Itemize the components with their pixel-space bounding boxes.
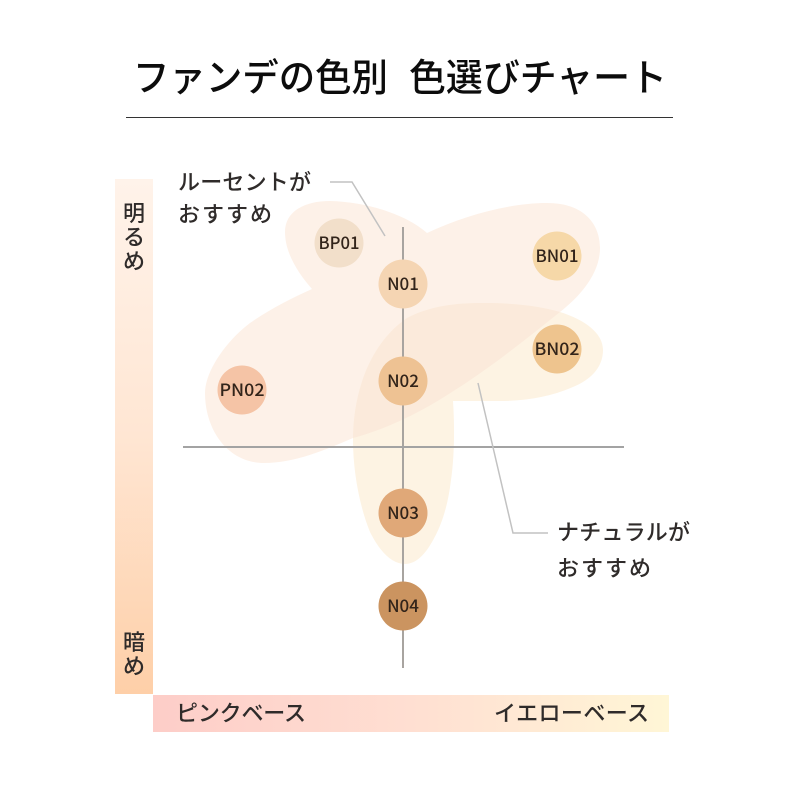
- callout: lucent: ルーセントが: [178, 165, 311, 197]
- brightness axis bar: [115, 179, 153, 694]
- base axis bar: [153, 695, 669, 732]
- label: brighter: る: [123, 220, 145, 252]
- callout: natural: [557, 515, 690, 583]
- swatch: N03: [378, 488, 428, 538]
- swatch: N04: [378, 582, 428, 630]
- title: ファンデの色別: [133, 47, 388, 102]
- label: brighter: 明: [123, 196, 145, 228]
- swatch: N04: N04: [387, 592, 419, 617]
- title: 色選びチャート: [409, 47, 667, 102]
- label: pink base: ピンクベース: [176, 696, 306, 728]
- callout: lucent: おすすめ: [178, 197, 272, 229]
- swatch: N01: N01: [387, 270, 419, 295]
- leader line: natural: [478, 383, 548, 533]
- swatch: N02: [378, 356, 428, 406]
- swatch: BP01: BP01: [318, 229, 360, 254]
- swatch: PN02: [218, 366, 266, 414]
- label: brighter: [123, 196, 145, 276]
- title rule: [126, 116, 673, 118]
- axis lines: [183, 227, 624, 668]
- label: yellow base: イエローベース: [494, 696, 649, 728]
- swatch: N02: N02: [387, 367, 419, 392]
- swatch: BN02: [532, 324, 582, 374]
- swatch: N01: [378, 260, 428, 308]
- swatch: BN01: [532, 232, 582, 280]
- swatch: N03: N03: [387, 499, 419, 524]
- swatch: BP01: [314, 218, 364, 268]
- callout: lucent: [178, 165, 311, 229]
- region: natural recommended: [353, 303, 603, 564]
- callout: natural: ナチュラルが: [557, 515, 690, 547]
- region: lucent recommended: [205, 201, 600, 463]
- swatch: BN01: BN01: [536, 242, 578, 267]
- label: darker: [123, 625, 145, 681]
- label: darker: め: [123, 649, 145, 681]
- swatch: BN02: BN02: [534, 335, 580, 360]
- title: [133, 47, 667, 102]
- label: brighter: め: [123, 244, 145, 276]
- region: overlap of lucent and natural: [353, 303, 560, 438]
- leader line: lucent: [330, 182, 385, 236]
- callout: natural: おすすめ: [557, 551, 651, 583]
- label: darker: 暗: [123, 625, 145, 657]
- swatch: PN02: PN02: [220, 376, 264, 401]
